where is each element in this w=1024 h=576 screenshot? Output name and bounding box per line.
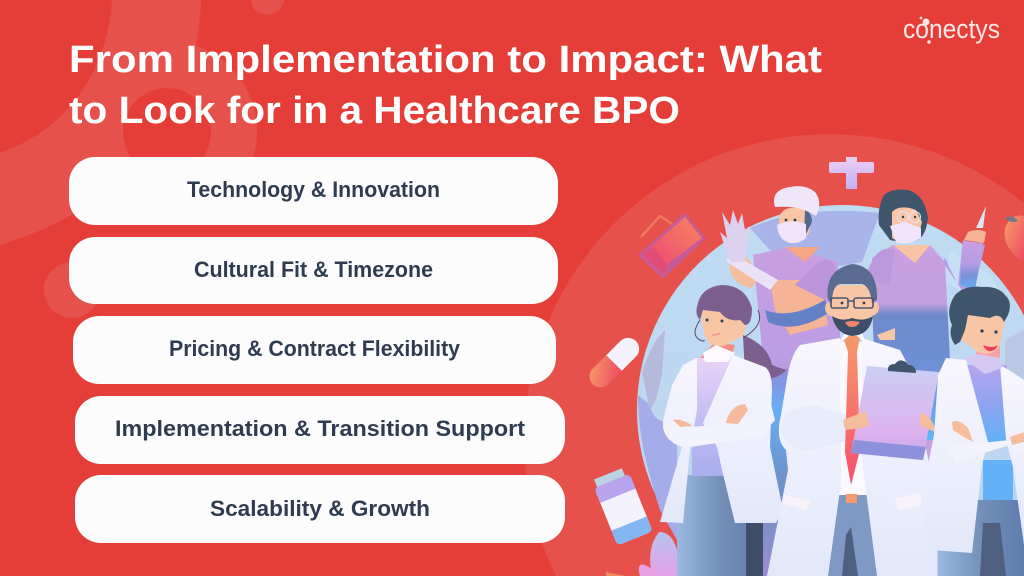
icon: first aid case — [638, 213, 706, 279]
item: Implementation & Transition Support — [75, 396, 565, 464]
icon: medical cross — [829, 157, 874, 189]
title: From Implementation to Impact: What — [69, 39, 822, 81]
decorative shapes: left swirl — [0, 0, 284, 318]
person: woman doctor left — [660, 285, 788, 576]
icon: plant — [606, 532, 677, 576]
item: Scalability & Growth — [75, 475, 565, 543]
person: doctor centre — [767, 264, 939, 576]
person: nurse — [868, 190, 986, 490]
item: Pricing & Contract Flexibility: Pricing & Contract Flexibility — [169, 336, 461, 361]
item: Cultural Fit & Timezone — [69, 237, 558, 304]
globe — [637, 205, 1024, 576]
logo: conectys: conectys — [903, 14, 1000, 44]
item: Implementation & Transition Support: Implementation & Transition Support — [115, 416, 526, 441]
clipboard — [851, 360, 939, 460]
title: to Look for in a Healthcare BPO — [69, 90, 680, 132]
title — [69, 39, 822, 132]
icon: medicine bottle — [591, 466, 653, 546]
icon: apple — [1005, 216, 1024, 262]
item: Technology & Innovation: Technology & Innovation — [187, 177, 440, 202]
illustration: healthcare team — [585, 157, 1024, 576]
item: Scalability & Growth: Scalability & Growth — [210, 496, 430, 521]
item: Pricing & Contract Flexibility — [73, 316, 556, 384]
person: surgeon — [720, 186, 842, 576]
icon: capsule — [585, 333, 644, 392]
item: Cultural Fit & Timezone: Cultural Fit & Timezone — [194, 257, 433, 282]
decorative shape: large circle behind illustration — [524, 134, 1024, 576]
item: Technology & Innovation — [69, 157, 558, 225]
person: doctor right — [920, 287, 1024, 576]
